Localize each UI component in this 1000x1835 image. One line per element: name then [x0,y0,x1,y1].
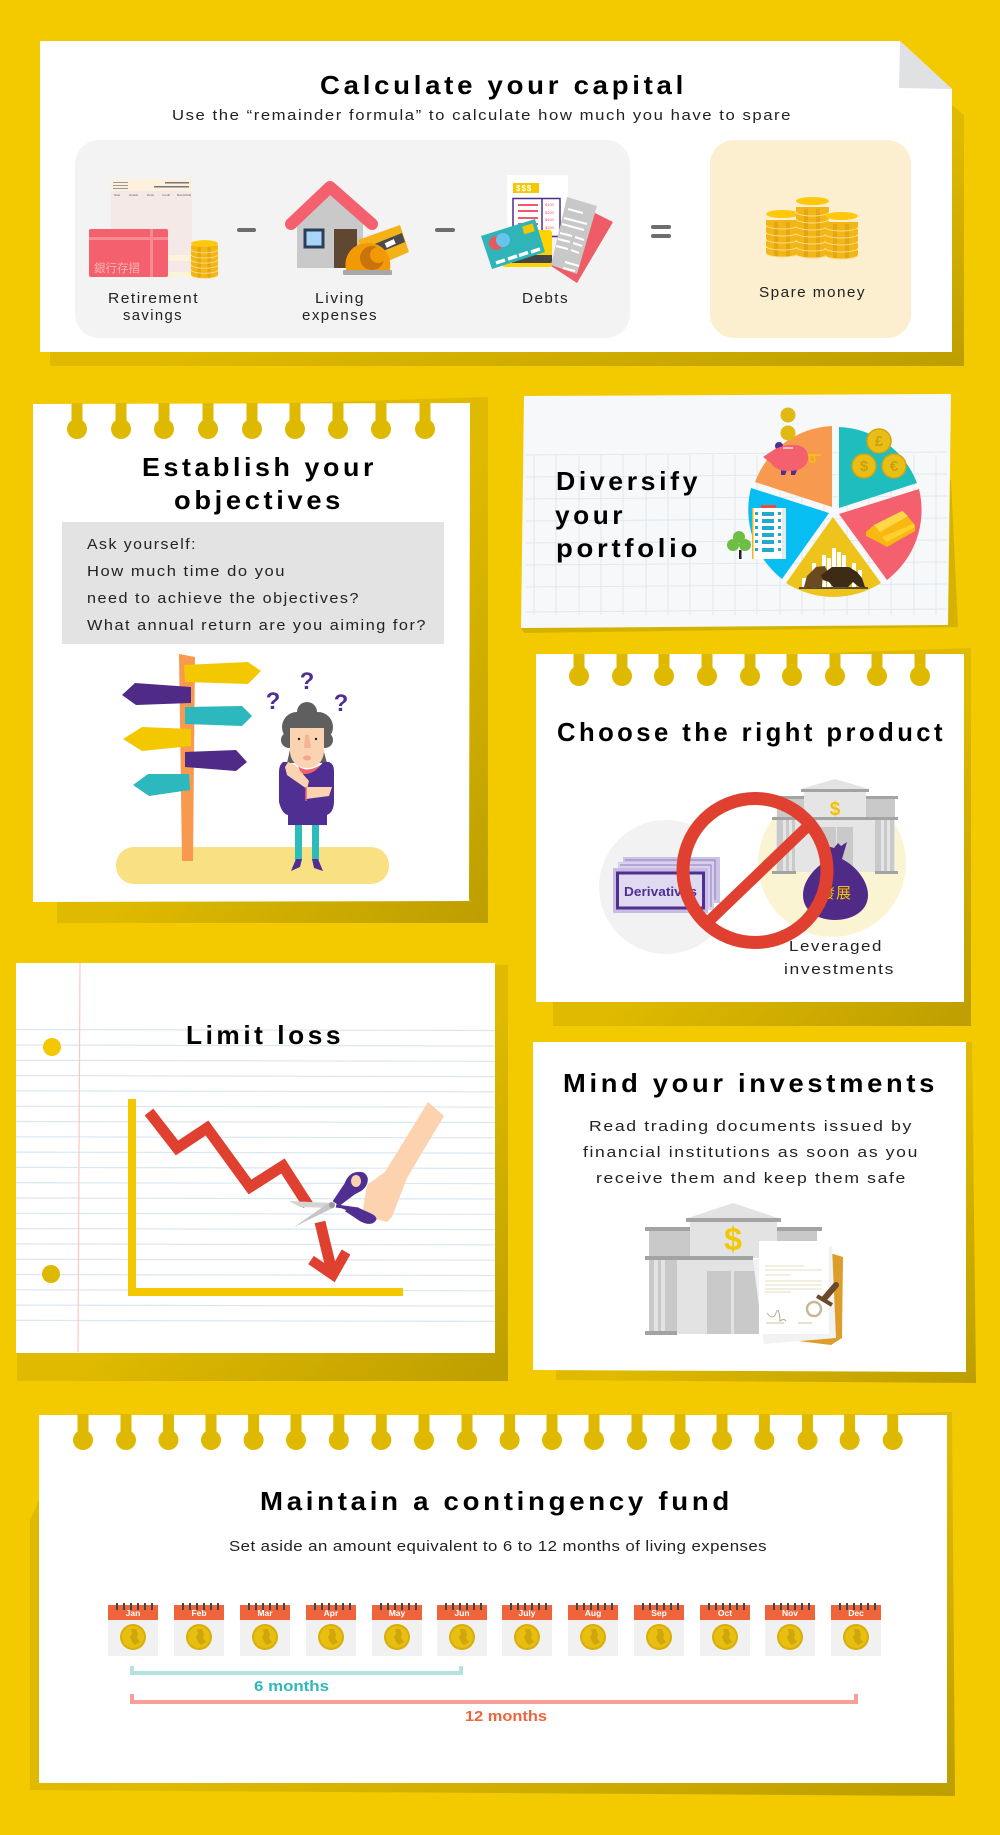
body text: Read trading documents issued by [589,1118,913,1135]
icon: derivatives notes [613,857,720,913]
body text [583,1118,919,1187]
icon: bank passbook: 銀行存摺 [94,261,140,275]
panel: calculate your capital [40,41,964,366]
label: retirement savings: savings [123,307,183,324]
ground [116,847,389,884]
callout: questions: Ask yourself: [87,536,197,553]
icon: currency coins: $ [860,458,869,475]
punched holes [42,1038,61,1283]
icon: coin stack [191,240,218,278]
callout: questions: How much time do you [87,563,286,580]
icon: spare money coin stacks [766,197,858,259]
calendars: twelve months: Sep [651,1608,667,1618]
icon: house with card and food [291,187,409,275]
icon: bank: $ [830,799,841,820]
icon: office building [752,505,786,559]
icon: bank passbook [89,179,192,277]
panel: maintain a contingency fund [30,1412,955,1796]
page fold [899,41,952,89]
heading: Choose the right product [557,717,946,747]
icon: money bag: 發展 [820,885,851,902]
calendars: twelve months: July [518,1608,536,1618]
calendars: twelve months: Mar [257,1608,273,1618]
label: retirement savings [108,290,199,324]
panel: establish your objectives [33,397,488,923]
question marks: ? [300,668,314,695]
panel: diversify your portfolio [521,394,958,633]
icon: prohibition sign [683,798,827,942]
heading [142,452,377,515]
label: leveraged investments [784,938,895,978]
heading: Calculate your capital [320,70,687,100]
body text: receive them and keep them safe [596,1170,907,1187]
subheading: Use the “remainder formula” to calculate how much you have to spare [172,107,792,124]
icon: gold bars [866,511,915,547]
icon: bills and credit cards: $100 [545,202,555,207]
icon: bank passbook: Date [114,193,121,197]
icon: bull and bear market [799,548,868,588]
notebook ruling [16,1030,495,1321]
icon: currency coins: € [890,458,899,475]
icon: money bag [803,842,868,920]
result box [710,140,911,338]
calendars: twelve months: Nov [782,1608,798,1618]
minus sign [237,228,256,232]
icon: bank [645,1203,822,1335]
formula box [75,140,630,338]
label: living expenses: expenses [302,307,378,324]
icon: signed documents and stamp [753,1241,843,1345]
equals sign [651,225,671,238]
icon: bills and credit cards [481,175,613,283]
icon: bills and credit cards: $300 [545,225,555,230]
body text: financial institutions as soon as you [583,1144,919,1161]
calendars: twelve months: Apr [324,1608,339,1618]
label: 6 months: 6 months [254,1678,329,1695]
icon: bank [772,779,898,874]
icon: confused woman [279,702,334,871]
binder rings [73,1414,903,1450]
calendars: twelve months: Aug [585,1608,601,1618]
icon: bank passbook: BALANCE [177,193,191,197]
icon: currency coins [852,429,906,478]
binder rings [569,654,930,686]
callout: questions [62,522,444,644]
panel: choose the right product [536,648,971,1026]
icon: bank: $ [724,1221,742,1257]
heading: Mind your investments [563,1068,938,1098]
calendars: twelve months: Dec [848,1608,864,1618]
heading: your [555,500,626,530]
label: living expenses: Living [315,290,365,307]
calendars: twelve months: Oct [718,1608,732,1618]
callout: questions: What annual return are you aiming for? [87,617,427,634]
label: leveraged investments: Leveraged [789,938,883,955]
heading: Limit loss [186,1020,344,1050]
callout: questions: need to achieve the objectives? [87,590,360,607]
pie chart [748,426,922,597]
chart axes [132,1099,403,1292]
binder rings [67,403,435,439]
calendars: twelve months: Jan [126,1608,140,1618]
icon: currency coins: £ [875,433,884,450]
panel: limit loss [16,963,508,1381]
icon: bills and credit cards: $400 [545,217,555,222]
calendars: twelve months: May [389,1608,406,1618]
label: 12 months: 12 months [465,1708,547,1725]
heading: Diversify [556,466,701,496]
calendars: twelve months: Feb [191,1608,207,1618]
calendars: twelve months [108,1603,881,1656]
calendars: twelve months: Jun [454,1608,470,1618]
icon: derivatives notes: Derivatives [624,884,697,899]
subheading: Set aside an amount equivalent to 6 to 12 months of living expenses [229,1538,767,1555]
heading [555,466,701,563]
heading: objectives [174,485,344,515]
icon: bills and credit cards: $$$ [516,184,532,193]
minus sign [435,228,455,232]
icon: bank passbook: Credit [162,193,170,197]
icon: bank passbook: Details [129,193,139,197]
heading: portfolio [556,533,701,563]
graph paper grid [526,452,947,615]
bracket: 6 months [132,1666,461,1673]
label: debts: Debts [522,290,569,307]
icon: bills and credit cards: $200 [545,210,555,215]
label: retirement savings: Retirement [108,290,199,307]
question marks [266,668,348,717]
question marks: ? [266,688,280,715]
heading: Establish your [142,452,377,482]
icon: piggy bank [763,408,821,475]
icon: tree [727,531,751,559]
backdrop circles [599,789,906,954]
heading: Maintain a contingency fund [260,1486,733,1516]
chart: falling line cut [149,1112,346,1275]
label: leveraged investments: investments [784,961,895,978]
icon: bank passbook: Debit [147,193,154,197]
margin line [78,963,80,1352]
bracket: 12 months [132,1694,856,1702]
question marks: ? [334,690,348,717]
label: spare money: Spare money [759,284,866,301]
label: living expenses [302,290,378,324]
icon: hand with scissors [289,1102,444,1227]
panel: mind your investments [533,1042,976,1383]
icon: signpost [122,654,261,861]
